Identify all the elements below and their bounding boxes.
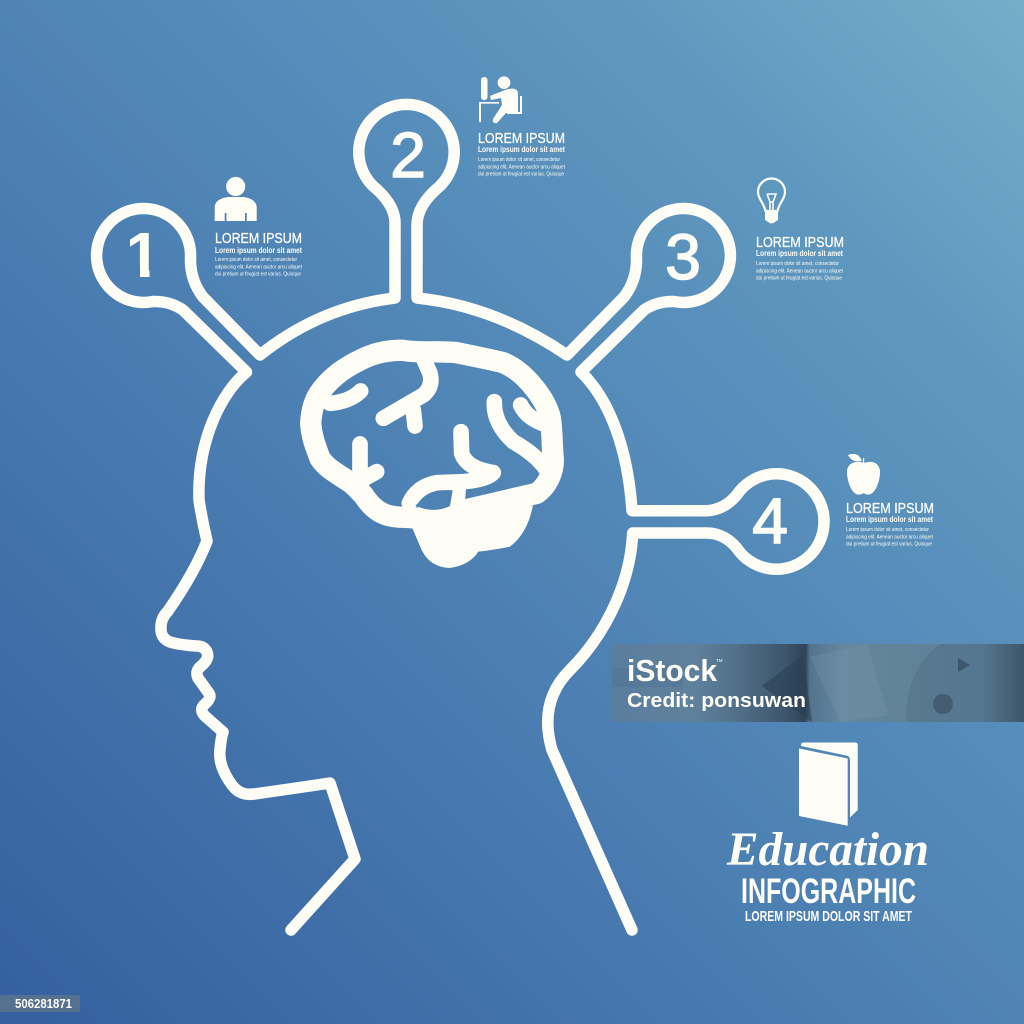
title: INFOGRAPHIC: INFOGRAPHIC [741, 872, 916, 911]
watermark band [612, 644, 1024, 722]
icon: person [215, 177, 257, 221]
body text 4: adipiscing elit. Aenean auctor arcu aliquet [846, 534, 934, 540]
image id tag: 506281871 [15, 997, 72, 1011]
body text 1: dui pretium ut feugiat est varius. Quisque [215, 272, 301, 278]
watermark credit: Credit: ponsuwan [627, 690, 806, 712]
subheading 4: Lorem ipsum dolor sit amet [846, 515, 933, 524]
heading 1: LOREM IPSUM [215, 230, 302, 247]
body text 2: Lorem ipsum dolor sit amet, consectetur [478, 157, 560, 163]
body text 3 [756, 261, 844, 282]
body text 3: dui pretium ut feugiat est varius. Quisque [756, 276, 842, 282]
body text 2: adipiscing elit. Aenean auctor arcu aliquet [478, 164, 566, 170]
number 1: 1 [125, 219, 161, 291]
heading 3: LOREM IPSUM [756, 234, 844, 251]
text block 2 [478, 76, 566, 178]
number 2: 2 [390, 119, 426, 191]
number 3: 3 [665, 221, 701, 293]
icon: brain [311, 350, 553, 568]
body text 4 [846, 527, 934, 548]
icon: apple [847, 454, 880, 495]
brain outer contour [311, 350, 553, 518]
text block 4 [846, 454, 934, 548]
body text 3: Lorem ipsum dolor sit amet, consectetur [756, 261, 839, 267]
body text 1 [215, 257, 303, 278]
number 4: 4 [752, 485, 788, 557]
subheading 3: Lorem ipsum dolor sit amet [756, 249, 843, 258]
body text 3: adipiscing elit. Aenean auctor arcu aliquet [756, 268, 844, 274]
head outline with numbered connector circles [97, 104, 824, 930]
subtitle: LOREM IPSUM DOLOR SIT AMET [745, 908, 912, 925]
watermark logo text: iStock [627, 653, 718, 688]
heading 2: LOREM IPSUM [478, 130, 565, 147]
brain folds [330, 358, 547, 507]
icon: person at computer [479, 76, 522, 123]
brain cerebellum [410, 485, 533, 568]
watermark trademark: TM [716, 658, 723, 663]
body text 2: dui pretium ut feugiat est varius. Quisque [478, 172, 564, 178]
body text 1: Lorem ipsum dolor sit amet, consectetur [215, 257, 297, 263]
subheading 1: Lorem ipsum dolor sit amet [215, 246, 302, 255]
icon: book [799, 742, 858, 826]
text block 3 [756, 178, 844, 282]
title: Education: Education [726, 823, 929, 876]
body text 4: Lorem ipsum dolor sit amet, consectetur [846, 527, 929, 533]
text block 1 [215, 177, 303, 278]
brain inner opening [415, 490, 453, 510]
body text 1: adipiscing elit. Aenean auctor arcu aliquet [215, 264, 303, 270]
outline: face, forehead, circle 1, circle 2, circle 3, circle 4 and back of the head [97, 104, 824, 930]
heading 4: LOREM IPSUM [846, 500, 934, 517]
body text 2 [478, 157, 566, 178]
image id tag [0, 995, 80, 1012]
icon: light bulb [758, 178, 785, 224]
body text 4: dui pretium ut feugiat est varius. Quisque [846, 542, 932, 548]
subheading 2: Lorem ipsum dolor sit amet [478, 145, 565, 154]
